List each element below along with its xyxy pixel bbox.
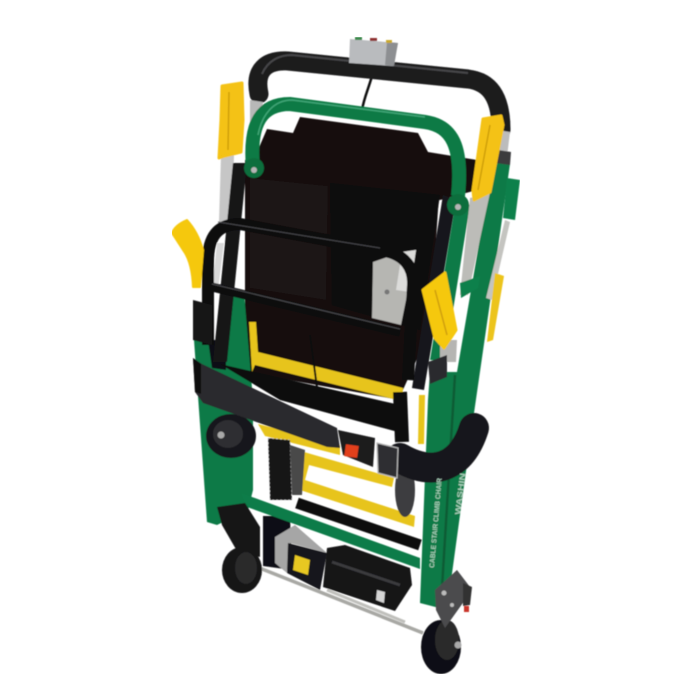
silver plate bbox=[372, 250, 416, 325]
bottom right wheel bbox=[421, 620, 462, 674]
right green rail bbox=[420, 150, 520, 610]
seat belt buckle bbox=[338, 430, 398, 478]
yellow grip: top left bbox=[219, 83, 243, 158]
left green rail bbox=[194, 292, 253, 525]
middle right small wheel bbox=[395, 463, 415, 517]
yellow grip: centre right bbox=[423, 273, 456, 348]
yellow grip: top right bbox=[473, 116, 503, 200]
silver telescopic posts bbox=[212, 100, 510, 290]
bottom left wheel bbox=[222, 547, 262, 593]
black folding frame bbox=[208, 222, 413, 380]
black backrest panel bbox=[245, 117, 477, 400]
rods bbox=[257, 567, 423, 633]
black mounting plate bbox=[217, 503, 260, 557]
rail lettering bbox=[429, 472, 467, 568]
dark uprights behind frame bbox=[213, 163, 470, 390]
right steel plate bbox=[435, 570, 472, 628]
rail lettering: CABLE STAIR CLIMB CHAIR bbox=[429, 478, 444, 568]
black push handle bbox=[258, 55, 501, 130]
yellow grip: left bbox=[172, 220, 203, 287]
right curled strap bbox=[400, 428, 474, 468]
middle left wheel bbox=[206, 414, 256, 458]
motor bbox=[275, 525, 412, 611]
green lower crossbar bbox=[241, 493, 420, 569]
control box cable bbox=[362, 76, 372, 110]
green arch frame bbox=[244, 100, 469, 216]
rail lettering: WASHIN bbox=[453, 472, 467, 515]
grey frame clamps bbox=[193, 300, 447, 384]
drive track bbox=[263, 438, 305, 570]
yellow cross bars bbox=[249, 322, 425, 527]
lower black bars bbox=[220, 335, 402, 442]
control box bbox=[349, 37, 398, 66]
yellow side plate bbox=[487, 273, 504, 342]
strap bbox=[193, 358, 340, 448]
